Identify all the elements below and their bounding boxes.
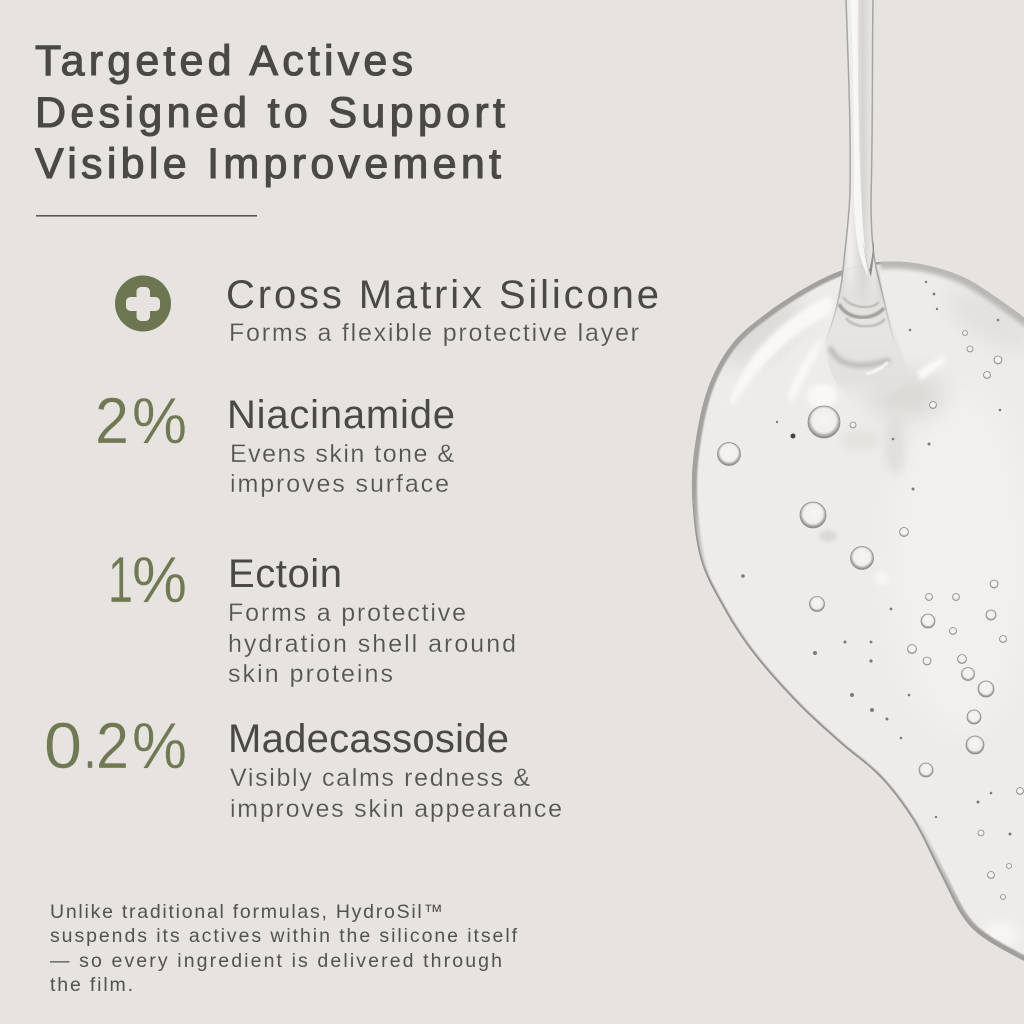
droplet body <box>692 262 1024 964</box>
title: Targeted Actives <box>35 37 413 85</box>
description <box>230 764 562 823</box>
footnote: the film. <box>50 974 133 996</box>
percentage 2%: % <box>132 384 187 457</box>
percentage 0.2% <box>44 709 187 782</box>
footnote: Unlike traditional formulas, HydroSil™ <box>50 901 443 923</box>
description: Visibly calms redness & <box>230 764 530 792</box>
description: skin proteins <box>228 660 393 688</box>
name: Niacinamide <box>227 393 455 437</box>
percentage 2%: 2 <box>95 384 129 457</box>
description <box>228 599 516 688</box>
name: Ectoin <box>228 552 342 596</box>
description: Forms a protective <box>228 599 466 627</box>
description: improves surface <box>230 470 449 498</box>
name: Cross Matrix Silicone <box>226 273 659 317</box>
falling stream <box>826 0 902 384</box>
ingredient: Niacinamide <box>95 384 455 498</box>
title rule <box>36 215 257 217</box>
percentage 1% <box>108 543 187 616</box>
percentage 0.2%: 0 <box>44 709 82 782</box>
footnote: — so every ingredient is delivered through <box>50 950 502 972</box>
percentage 0.2%: 2 <box>96 709 129 782</box>
percentage 2% <box>95 384 187 457</box>
stream flare into pool <box>827 270 908 405</box>
description: Forms a flexible protective layer <box>229 319 639 347</box>
percentage 0.2%: . <box>83 709 97 782</box>
air bubbles <box>718 330 1024 900</box>
description <box>230 440 454 498</box>
percentage 0.2%: % <box>132 709 187 782</box>
serum droplet illustration <box>692 0 1024 964</box>
ingredient: Ectoin <box>108 543 516 688</box>
description: improves skin appearance <box>230 795 562 823</box>
title: Visible Improvement <box>35 140 501 188</box>
tiny specks <box>741 281 1012 836</box>
description: hydration shell around <box>228 630 516 658</box>
title <box>35 37 505 188</box>
ingredient: Cross Matrix Silicone <box>115 273 659 347</box>
ingredient: Madecassoside <box>44 709 562 823</box>
percentage 1%: % <box>132 543 187 616</box>
footnote: suspends its actives within the silicone itself <box>50 925 518 947</box>
icon: medical cross in circle <box>115 276 171 332</box>
title: Designed to Support <box>35 89 505 137</box>
droplet edge shading <box>692 262 1024 964</box>
description: Evens skin tone & <box>230 440 454 468</box>
footnote <box>50 901 518 996</box>
name: Madecassoside <box>228 717 509 761</box>
percentage 1%: 1 <box>108 543 133 616</box>
